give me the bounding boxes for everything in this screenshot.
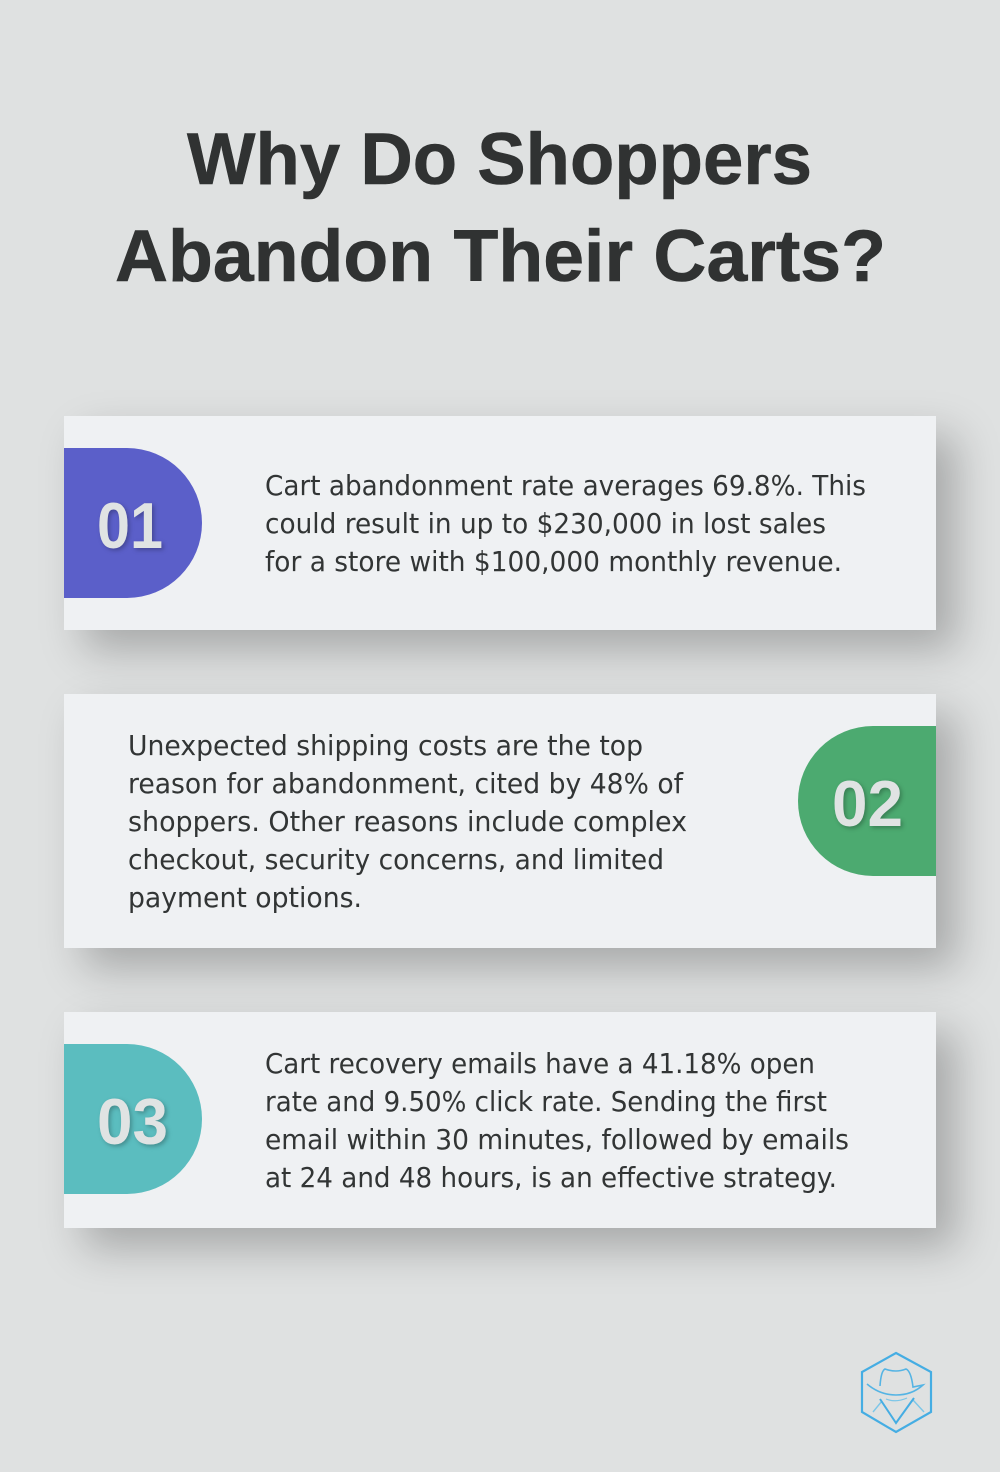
text block: card 01: Cart abandonment rate averages 69.8%. This [265,470,866,502]
text block: card 03: email within 30 minutes, followed by emails [265,1124,849,1156]
title: Abandon Their Carts? [115,216,886,297]
title [115,119,886,297]
text block: card 02: reason for abandonment, cited by 48% of [128,768,684,800]
panel: card 02 [64,694,936,948]
badge: 03 [64,1044,202,1194]
panel: card 03 [64,1012,936,1228]
text block: card 02: checkout, security concerns, and limited [128,844,664,876]
badge: 01 [64,448,202,598]
badge: 02: 02 [832,767,903,840]
text block: card 02: shoppers. Other reasons include complex [128,806,687,838]
badge: 01: 01 [97,489,163,562]
text block: card 03: rate and 9.50% click rate. Sending the first [265,1086,827,1118]
text block: card 03: Cart recovery emails have a 41.18% open [265,1048,815,1080]
icon: hexagon spy logo [860,1352,932,1434]
text block: card 02: Unexpected shipping costs are the top [128,730,643,762]
title: Why Do Shoppers [187,119,812,200]
text block: card 02 [128,730,687,914]
badge: 03: 03 [97,1085,168,1158]
text block: card 01 [265,470,866,578]
badge: 02 [798,726,936,876]
text block: card 03 [265,1048,849,1194]
text block: card 02: payment options. [128,882,362,914]
text block: card 03: at 24 and 48 hours, is an effective strategy. [265,1162,837,1194]
text block: card 01: for a store with $100,000 monthly revenue. [265,546,842,578]
panel: card 01 [64,416,936,630]
text block: card 01: could result in up to $230,000 in lost sales [265,508,826,540]
